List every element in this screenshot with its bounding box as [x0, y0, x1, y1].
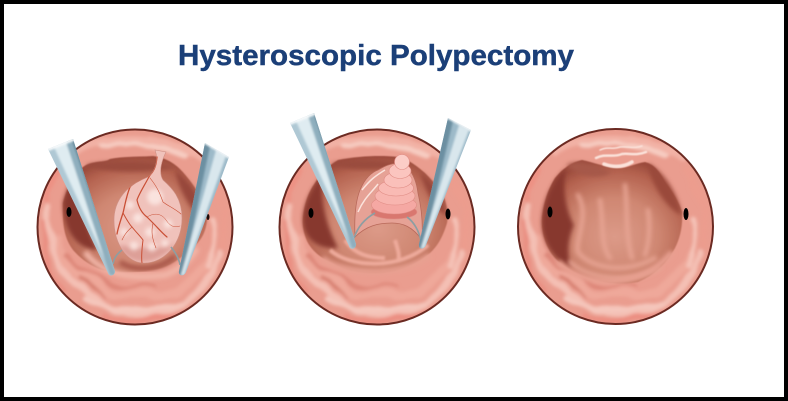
ostium right [206, 214, 210, 220]
wire loop [354, 213, 421, 241]
title: Hysteroscopic Polypectomy [178, 40, 574, 72]
wire loop [113, 247, 180, 265]
wall outline [518, 129, 713, 324]
cavity [63, 156, 207, 272]
right resectoscope sheath [178, 143, 229, 276]
panel: cavity after removal [518, 129, 713, 324]
ostium left [308, 208, 314, 218]
uterine wall [518, 130, 712, 324]
resection membrane [355, 164, 422, 240]
left resectoscope sheath [290, 113, 356, 249]
polyp with vessels [114, 150, 182, 263]
shaved polyp tiers [371, 154, 417, 219]
panel: polyp before removal [38, 130, 235, 324]
right resectoscope sheath [418, 118, 471, 249]
healed polyp site [596, 146, 646, 166]
left resectoscope sheath [48, 139, 115, 276]
cavity [303, 156, 448, 273]
ostium right [684, 208, 688, 220]
wall outline [38, 130, 232, 324]
ostium left [548, 206, 552, 218]
uterine wall [280, 130, 474, 324]
panel: polyp being resected [280, 105, 477, 324]
ostium left [66, 207, 72, 217]
uterine wall [38, 130, 232, 324]
wall outline [280, 130, 474, 324]
ostium right [446, 208, 450, 220]
cavity [542, 160, 682, 283]
